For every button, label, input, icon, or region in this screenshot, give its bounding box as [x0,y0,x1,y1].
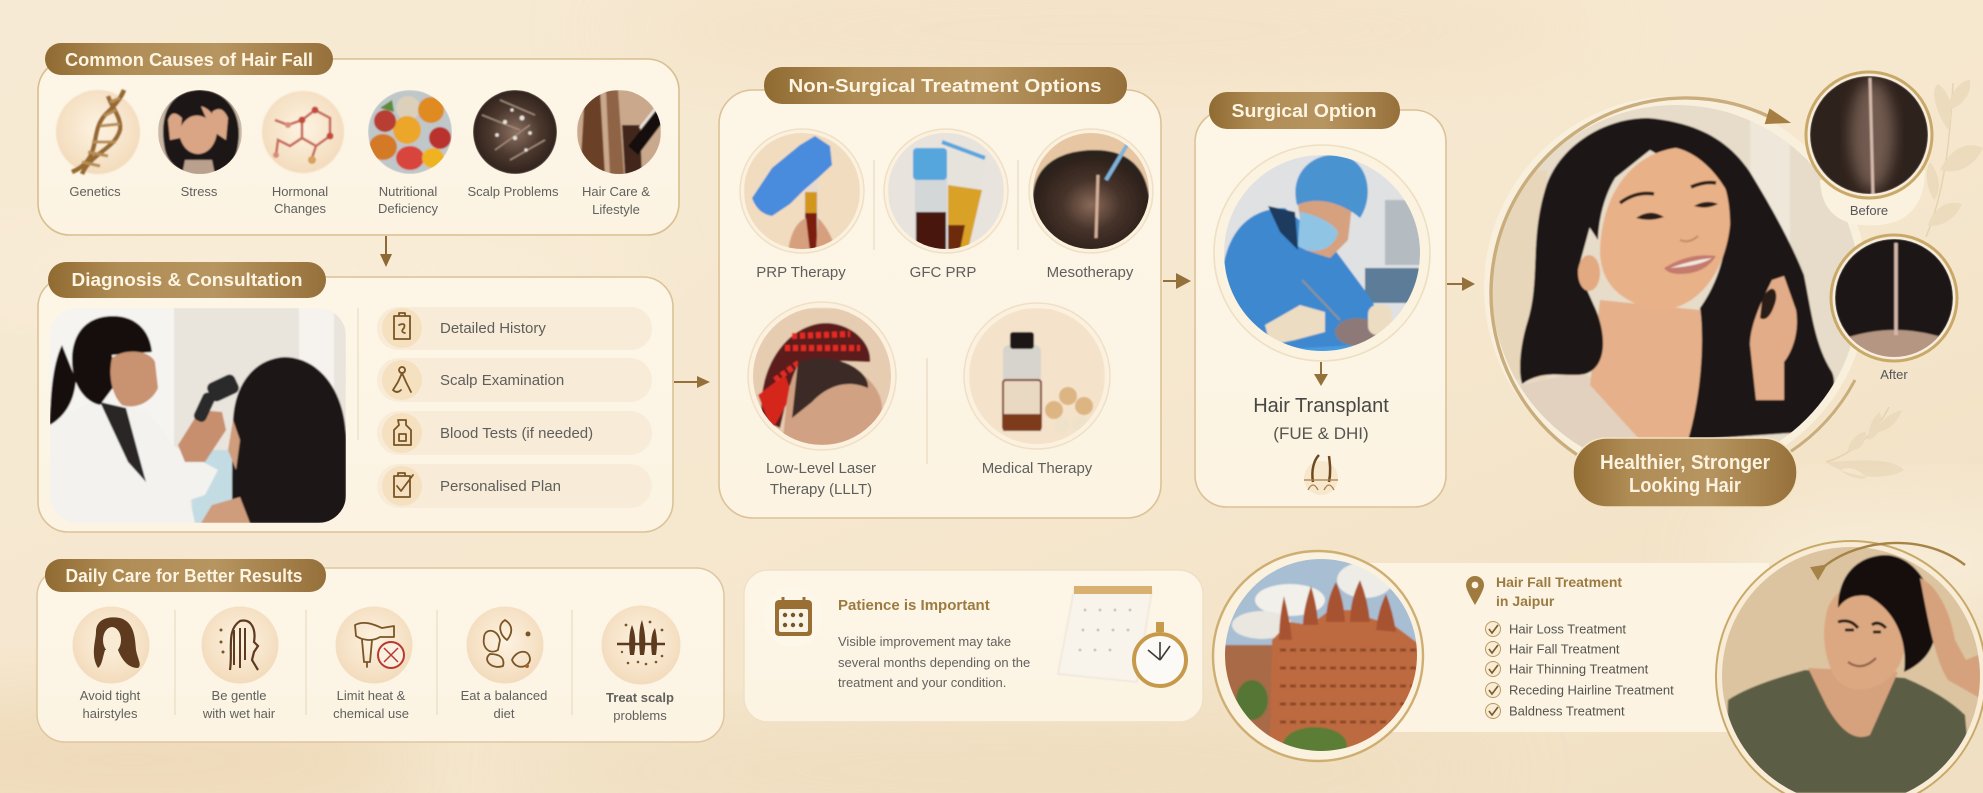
panel: patience is important [744,570,1203,722]
arrow: causes to diagnosis [380,236,392,267]
photo: PRP therapy [740,129,864,253]
photo: mesotherapy [1029,129,1153,253]
arrow: diagnosis to non-surgical [674,376,710,388]
cause labels: Hormonal [272,184,328,199]
cause labels: Changes [274,201,327,216]
checklist: Hair Thinning Treatment [1509,662,1649,676]
photo: low-level laser therapy [748,302,896,450]
text: patience: several months depending on the [838,655,1030,670]
icon: calendar [763,587,823,647]
dividers [175,610,572,715]
panel: after photo [1831,235,1957,382]
text: patience: treatment and your condition. [838,675,1006,690]
checklist: Receding Hairline Treatment [1509,682,1674,698]
labels: treatments row 2 [766,460,1093,498]
care labels: problems [613,708,667,723]
cause labels: Stress [181,184,218,199]
panel: non-surgical treatment options [719,67,1161,518]
panel: after photo: After [1880,367,1908,382]
arrow: surgical to results [1447,277,1475,291]
labels: treatments row 2: Therapy (LLLT) [770,481,872,498]
icon: scalp problems [473,90,557,174]
photo: Hawa Mahal Jaipur [1213,551,1423,763]
panel: before photo [1806,72,1932,225]
panel: daily care for better results [37,559,724,742]
cause labels: Lifestyle [592,202,640,217]
text: panel title: Hair Fall Treatment [1496,574,1622,590]
callout: healthier, stronger looking hair [1573,438,1797,507]
callout: healthier, stronger looking hair: Healthier, Stronger [1600,452,1770,474]
labels: treatments row 2: Medical Therapy [982,460,1093,477]
labels: treatments row 1: Mesotherapy [1047,264,1134,281]
heading: diagnosis [48,262,326,298]
care labels: Treat scalp [606,690,674,705]
panel: hair fall treatment in Jaipur [1213,551,1769,763]
cause labels: Scalp Problems [467,184,559,199]
labels: treatments row 2: Low-Level Laser [766,460,876,477]
icon: location pin [1466,576,1484,605]
row: scalp examination [377,358,652,402]
heading: common causes: Common Causes of Hair Fall [65,50,313,70]
cause labels: Deficiency [378,201,438,216]
arrow: surgeon to hair transplant [1314,362,1328,386]
arrow: non-surgical to surgical [1163,273,1191,289]
labels: treatments row 1: PRP Therapy [756,264,846,281]
photo: surgeon [1214,145,1430,361]
text: patience: Visible improvement may take [838,634,1011,649]
heading: non-surgical [764,67,1127,104]
row: blood tests: Blood Tests (if needed) [440,425,593,442]
result panel: healthy woman [1484,72,1957,507]
heading: surgical option: Surgical Option [1232,101,1376,121]
labels: treatments row 1: GFC PRP [910,264,976,281]
panel: common causes of hair fall [38,43,679,235]
heading: non-surgical: Non-Surgical Treatment Options [788,76,1102,96]
icon: stress [158,90,242,175]
cause labels: Nutritional [379,184,437,199]
divider [357,308,359,440]
icon: treat scalp problems [602,606,680,684]
dividers [874,160,1018,464]
panel: before photo: Before [1850,203,1888,218]
row: personalised plan [377,464,652,508]
heading: surgical option [1209,92,1400,129]
row: detailed history [377,307,652,350]
care labels: Be gentle [212,688,266,703]
callout: healthier, stronger looking hair: Looking Hair [1629,475,1741,497]
icon: eat a balanced diet [466,606,544,684]
panel: diagnosis and consultation [38,262,673,532]
care labels: Avoid tight [80,688,141,703]
care labels: diet [494,706,515,721]
decorative leaves [1826,80,1983,479]
cause labels: Genetics [69,184,121,199]
text: hair transplant: (FUE & DHI) [1273,424,1369,443]
illustration: calendar and clock [1058,586,1186,686]
arc arrow around portrait [1491,98,1855,454]
icon: be gentle with wet hair [202,606,278,684]
icon: hair care and lifestyle [577,90,663,175]
row: personalised plan: Personalised Plan [440,478,561,495]
text: patience [838,597,1030,690]
cause labels [69,184,650,217]
arc arrow over man [1812,543,1965,578]
labels: treatments row 1 [756,264,1134,281]
heading: daily care: Daily Care for Better Results [66,566,302,586]
text: hair transplant: Hair Transplant [1253,395,1389,417]
checklist: Baldness Treatment [1509,704,1625,718]
checklist: Hair Loss Treatment [1509,622,1626,636]
icon: hair follicle [1304,455,1338,495]
photo: man with thicker hair [1716,541,1983,793]
checklist: Hair Fall Treatment [1509,642,1620,656]
care labels: chemical use [333,706,409,721]
row: blood tests [377,411,652,455]
checklist [1486,622,1674,718]
heading: diagnosis: Diagnosis & Consultation [72,270,302,290]
heading: daily care [45,559,326,592]
heading: common causes [45,43,333,75]
row: scalp examination: Scalp Examination [440,372,564,389]
icon: limit heat and chemical use [336,606,412,684]
text: panel title [1496,574,1622,609]
care labels: Eat a balanced [461,688,547,703]
text: panel title: in Jaipur [1496,593,1555,609]
icon: genetics DNA [56,90,140,174]
care labels: Limit heat & [337,688,406,703]
text: patience: Patience is Important [838,597,990,614]
care labels: hairstyles [83,706,138,721]
row: detailed history: Detailed History [440,320,546,337]
photo: smiling woman [1492,105,1855,448]
care labels [80,688,674,723]
photo: GFC PRP [884,129,1008,253]
icon: nutritional deficiency [368,90,452,174]
text: hair transplant [1253,395,1389,443]
photo: medical therapy [964,303,1110,449]
care labels: with wet hair [202,706,276,721]
cause labels: Hair Care & [582,184,650,199]
photo: doctor examining scalp [50,308,346,523]
icon: hormonal changes [262,91,344,173]
icon: avoid tight hairstyles [72,606,150,684]
panel: surgical option [1195,92,1446,507]
